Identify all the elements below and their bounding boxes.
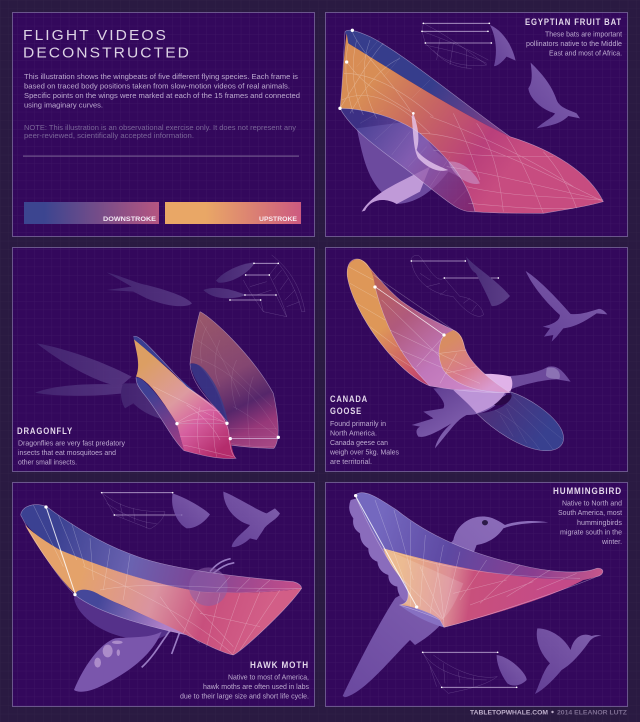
panel: egyptian fruit bat [326, 12, 628, 236]
title: DECONSTRUCTED [23, 44, 191, 62]
small wireframe [410, 255, 499, 316]
moth wing: main band [25, 525, 302, 655]
panel: hummingbird [326, 482, 628, 706]
left wing: far band [133, 336, 228, 430]
goose heading: CANADA [330, 394, 368, 404]
moth ribs [33, 505, 302, 655]
small wireframe [101, 492, 182, 529]
goose wing: blue downstroke [477, 392, 564, 451]
small wing silhouettes [203, 262, 255, 298]
small wing silhouette [490, 25, 516, 66]
hummingbird description: Native to North and [562, 498, 622, 508]
goose description: Found primarily in [330, 419, 386, 428]
goose silhouette large [412, 366, 571, 448]
goose heading [330, 394, 368, 416]
small wing silhouette [497, 655, 527, 686]
legend: downstroke [24, 202, 159, 224]
hummingbird ribs [355, 495, 580, 627]
moth head overlay [189, 567, 228, 606]
small moth silhouette [223, 492, 280, 547]
hummingbird description: migrate south in the [560, 528, 622, 536]
dragonfly description: other small insects. [18, 458, 77, 466]
moth artwork [21, 492, 302, 692]
hummingbird control points [354, 494, 418, 609]
hummingbird silhouette large [343, 498, 548, 697]
small hummingbird silhouette [535, 628, 602, 694]
dragonfly silhouette small [107, 272, 192, 306]
goose wing: orange lobe [347, 259, 430, 386]
small goose silhouette [526, 271, 607, 342]
moth frame [12, 482, 314, 706]
goose description [329, 419, 399, 466]
bat heading: EGYPTIAN FRUIT BAT [525, 17, 622, 27]
footer credit: TABLETOPWHALE.COM [470, 710, 549, 716]
small wireframe [421, 22, 492, 68]
hummingbird description: South America, most [558, 508, 623, 517]
intro frame [12, 12, 314, 236]
footer credit [470, 710, 627, 716]
small bat silhouette [528, 63, 580, 128]
goose heading: GOOSE [330, 406, 362, 416]
hummingbird heading: HUMMINGBIRD [553, 486, 622, 496]
hummingbird description: winter. [601, 537, 622, 546]
dragonfly silhouette large [35, 343, 187, 423]
goose wing: main surface [347, 259, 510, 393]
moth description: hawk moths are often used in labs [203, 682, 309, 691]
bat frame [326, 12, 628, 236]
moth control points [44, 505, 77, 596]
panel: introduction [12, 12, 314, 236]
wing outlines [340, 30, 603, 213]
intro text: based on traced body positions taken from slow-motion videos of real animals. [24, 82, 290, 90]
bat description: These bats are important [545, 30, 623, 38]
hummingbird description: hummingbirds [577, 518, 622, 527]
note text: peer-reviewed, scientifically accepted information. [24, 131, 194, 140]
bat silhouette large [357, 120, 480, 212]
hummingbird wing: near band [399, 605, 444, 627]
intro text: using imaginary curves. [24, 100, 103, 110]
left wing: main band [134, 339, 227, 423]
goose description: North America. [330, 428, 377, 438]
footer credit: 2014 ELEANOR LUTZ [557, 710, 627, 716]
wing band: far downstroke [345, 30, 510, 137]
title [23, 27, 191, 62]
intro text: This illustration shows the wingbeats of five different flying species. Each frame is [24, 72, 298, 81]
small wing silhouette [172, 493, 210, 528]
dragonfly heading: DRAGONFLY [17, 426, 73, 436]
hummingbird description [558, 498, 623, 546]
bat artwork [338, 22, 603, 213]
goose ribs [348, 267, 480, 383]
bat description [526, 30, 623, 58]
intro text [24, 72, 300, 110]
moth description [180, 672, 309, 700]
title: FLIGHT VIDEOS [23, 27, 168, 44]
goose frame [326, 248, 628, 472]
right wing [190, 312, 278, 448]
left wing: near band [136, 377, 184, 451]
hummingbird wing: far band [355, 493, 603, 580]
moth heading: HAWK MOTH [250, 660, 309, 670]
hummingbird artwork [343, 493, 603, 697]
dragonfly control points [175, 422, 280, 440]
legend: upstroke: UPSTROKE [259, 216, 298, 223]
wing feathers [349, 498, 417, 602]
bat description: pollinators native to the Middle [526, 39, 622, 48]
intro text: Specific points on the wings were marked at each of the 15 frames and connected [24, 91, 300, 100]
panel: hawk moth [12, 482, 314, 706]
moth description: Native to most of America, [228, 672, 309, 682]
legend: upstroke [165, 202, 301, 224]
dragonfly description: Dragonflies are very fast predatory [18, 438, 125, 448]
note text: NOTE: This illustration is an observational exercise only. It does not represent any [24, 123, 296, 132]
note text [24, 123, 296, 140]
goose control points [373, 285, 446, 337]
moth wing: far band [21, 505, 302, 593]
dragonfly description [18, 438, 125, 466]
goose artwork [347, 255, 607, 451]
legend: downstroke: DOWNSTROKE [103, 216, 157, 223]
dragonfly frame [12, 248, 314, 472]
moth wing: near band [75, 590, 187, 635]
goose description: weigh over 5kg. Males [329, 448, 399, 456]
panel: canada goose [326, 248, 628, 472]
wing band: near downstroke [340, 108, 475, 212]
left wing: lower band [177, 423, 236, 459]
bat description: East and most of Africa. [549, 48, 622, 58]
panel: dragonfly [12, 248, 314, 472]
dragonfly description: insects that eat mosquitoes and [18, 448, 116, 457]
goose description: Canada geese can [330, 438, 388, 447]
wing ribs [340, 31, 603, 213]
moth description: due to their large size and short life cycle. [180, 692, 309, 700]
hummingbird wing: main band [383, 548, 583, 627]
goose description: are territorial. [330, 457, 372, 466]
control points [338, 29, 415, 115]
bat body overlay [412, 113, 448, 171]
small wing silhouette [466, 257, 510, 306]
hummingbird frame [326, 482, 628, 706]
small wireframe [422, 651, 517, 693]
dragonfly artwork [35, 255, 305, 459]
moth silhouette large [74, 559, 234, 692]
goose wing: front lobe [439, 330, 510, 393]
small wireframe [229, 255, 305, 317]
wing band: upstroke [340, 33, 603, 213]
